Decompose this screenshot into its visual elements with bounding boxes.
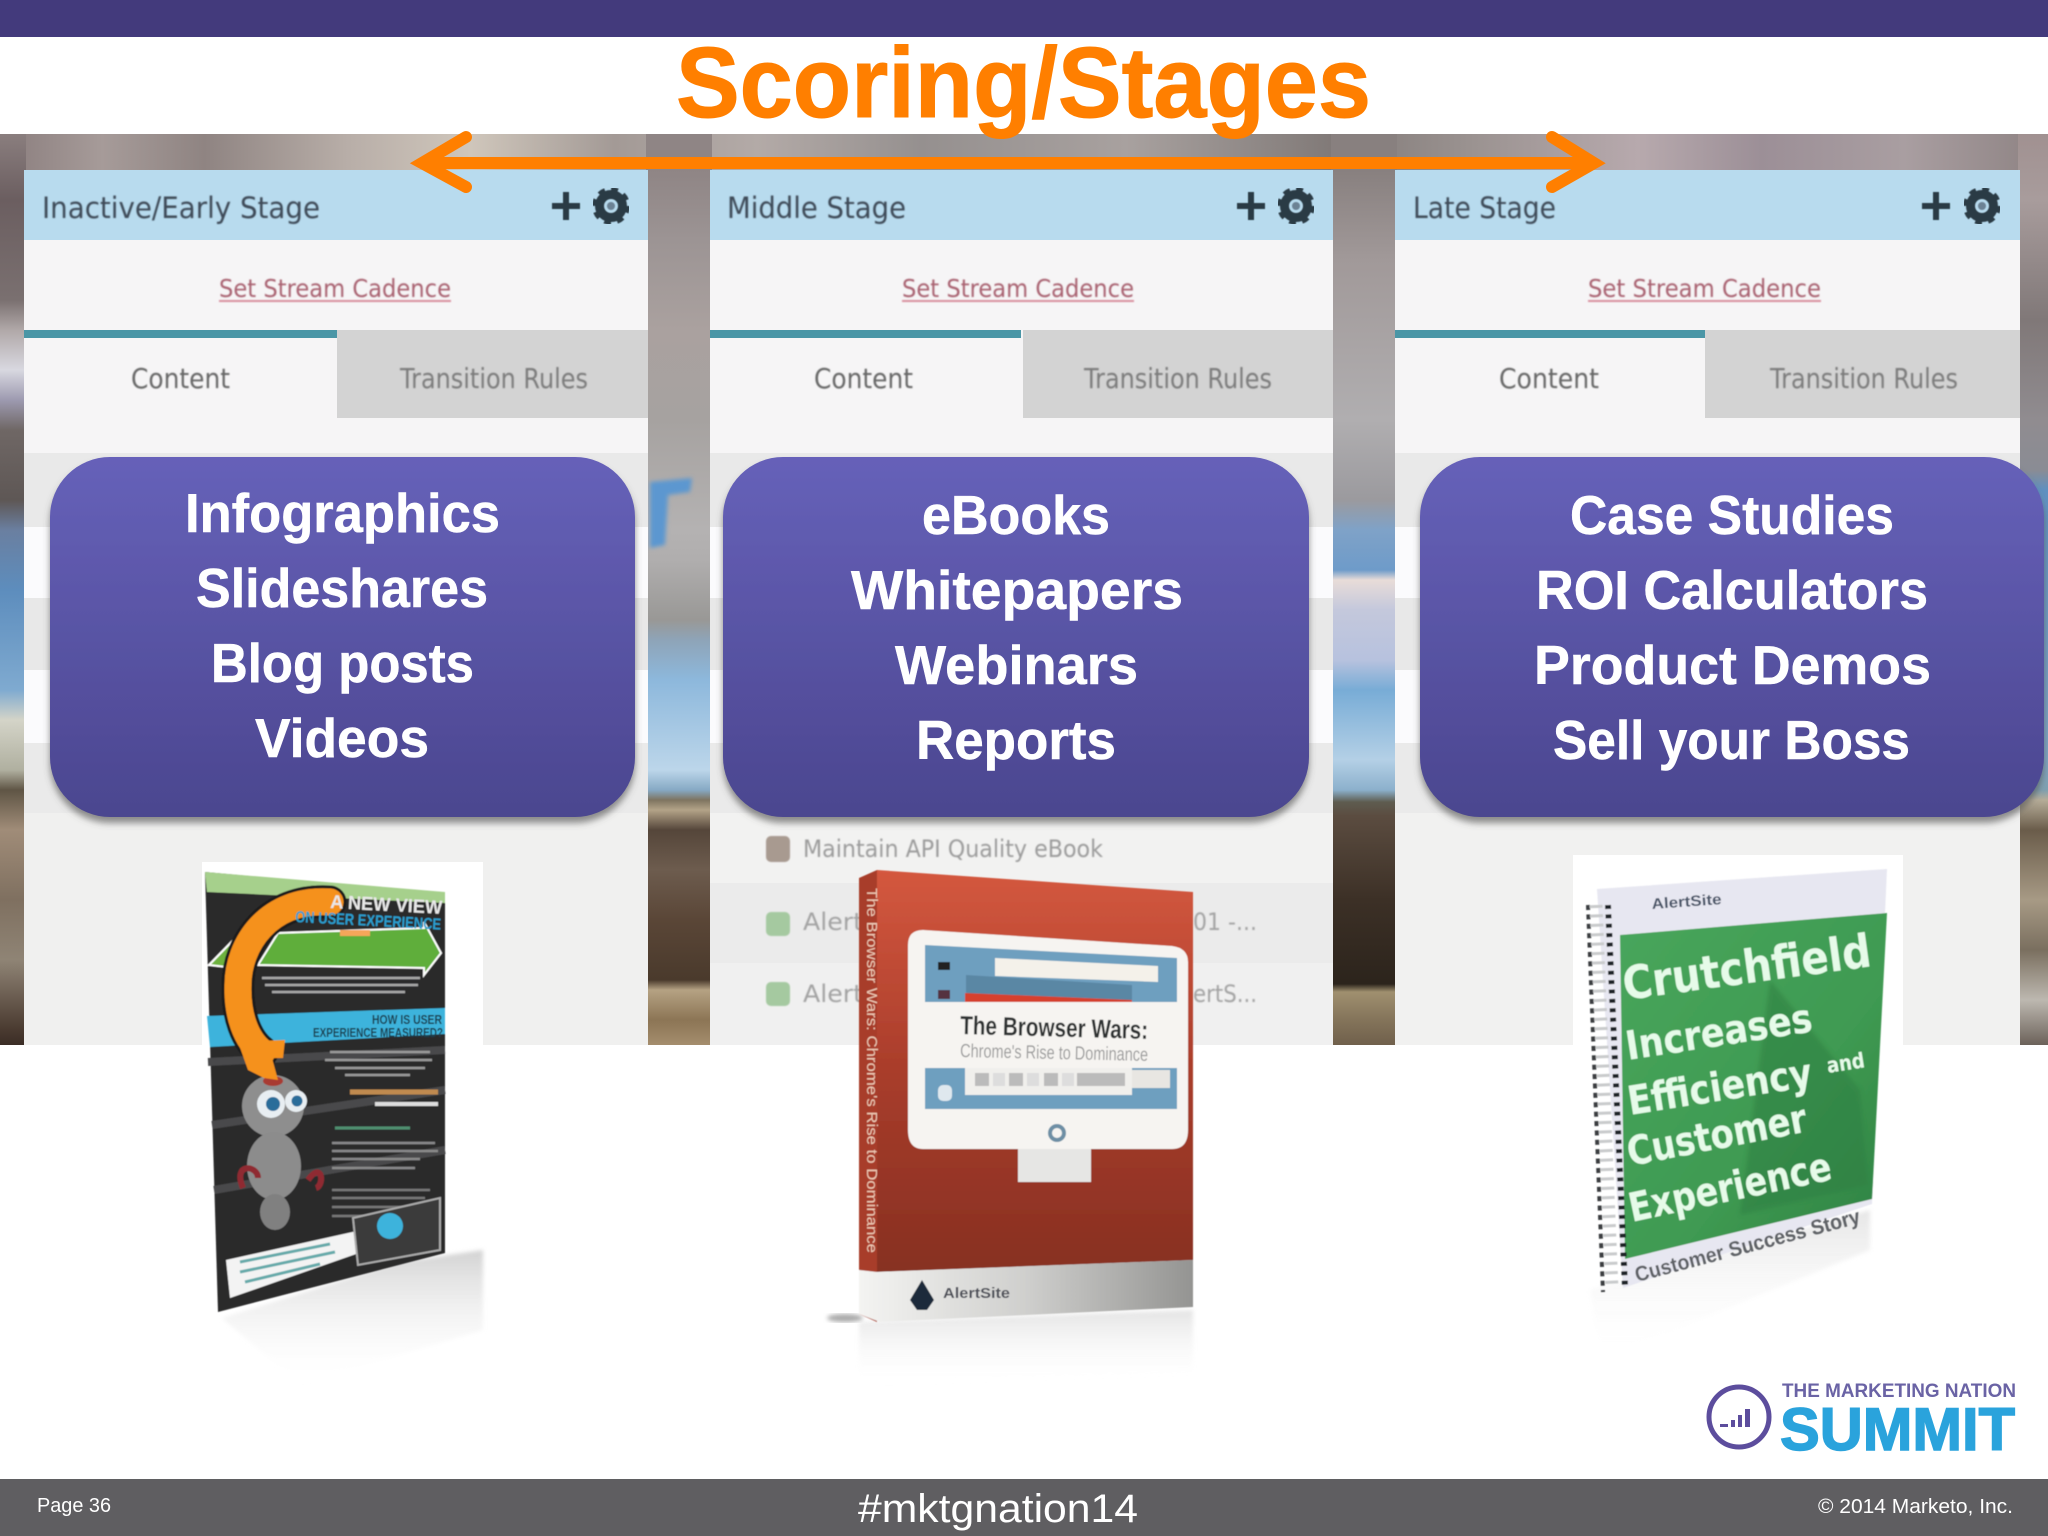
background photograph strips (0, 134, 2048, 1045)
header bar (1395, 170, 2020, 240)
callout: late stage content types: ROI Calculators (1536, 559, 1928, 621)
laptop reflection (222, 1250, 483, 1385)
icon: plus (1237, 192, 1265, 220)
content list rows: Alert (803, 980, 863, 1008)
callout: early stage content types (50, 457, 635, 817)
infographic thumbnail (202, 862, 483, 1385)
callout: late stage content types (1420, 457, 2044, 817)
copyright: © 2014 Marketo, Inc. (1818, 1496, 2013, 1518)
monitor (1018, 1140, 1091, 1182)
book shadow (827, 1314, 863, 1322)
tab: content (1395, 330, 1705, 395)
ebook thumbnail: The Browser Wars (827, 870, 1193, 1385)
callout: middle stage content types: Reports (916, 709, 1116, 771)
tab: transition rules (337, 330, 648, 418)
callout: middle stage content types: eBooks (922, 484, 1110, 546)
tab: content (24, 330, 337, 395)
callout: middle stage content types: Whitepapers (851, 559, 1183, 621)
callout: early stage content types: Infographics (185, 482, 500, 544)
book body: Chrome's Rise to Dominance (960, 1041, 1148, 1066)
AlertSite logo (910, 1280, 934, 1310)
book reflection (859, 1310, 1193, 1385)
callout: late stage content types: Case Studies (1570, 484, 1894, 546)
link: set stream cadence: Set Stream Cadence (902, 274, 1134, 303)
panel: Middle Stage (710, 170, 1333, 1045)
content list rows: ertS... (1193, 980, 1257, 1008)
notebook: and (1825, 1048, 1866, 1078)
poster sheet: EXPERIENCE MEASURED? (313, 1025, 443, 1040)
page number: Page 36 (37, 1495, 111, 1517)
content list rows: Maintain API Quality eBook (803, 835, 1103, 863)
tab: transition rules (1705, 330, 2020, 418)
notebook: Efficiency (1624, 1050, 1815, 1125)
header bar (710, 170, 1333, 240)
callout: early stage content types: Slideshares (196, 557, 488, 619)
poster headings: A NEW VIEW (330, 892, 443, 919)
tab: content: Content (814, 362, 913, 395)
icon: gear (1966, 190, 1998, 222)
book body: AlertSite (943, 1285, 1010, 1302)
notebook: AlertSite (1651, 891, 1722, 913)
spiral binding (1588, 905, 1625, 1292)
callout: middle stage content types (723, 457, 1309, 817)
content list rows: Alert (803, 908, 863, 936)
callout: middle stage content types: Webinars (895, 634, 1138, 696)
top purple bar (0, 0, 2048, 37)
logo: Marketing Nation Summit (1709, 1381, 2016, 1463)
header bar (24, 170, 648, 240)
callout: late stage content types: Sell your Boss (1553, 709, 1910, 771)
notebook: Customer (1623, 1096, 1811, 1176)
book body (859, 870, 1193, 1322)
hashtag: #mktgnation14 (858, 1487, 1138, 1531)
callout: late stage content types: Product Demos (1534, 634, 1931, 696)
notebook: Crutchfield (1619, 923, 1874, 1011)
tab: transition rules: Transition Rules (399, 362, 588, 395)
tab: content (710, 330, 1021, 395)
icon: plus (552, 192, 580, 220)
content list rows: 01 -... (1193, 908, 1257, 936)
footer bar (0, 1479, 2048, 1536)
tab: transition rules: Transition Rules (1769, 362, 1958, 395)
result box (226, 1221, 402, 1298)
logo tagline: THE MARKETING NATION (1782, 1381, 2016, 1402)
icon: gear (595, 190, 627, 222)
poster sheet: HOW IS USER (372, 1012, 442, 1027)
poster sheet (205, 872, 445, 1312)
tab: content: Content (131, 362, 230, 395)
notebook (1588, 869, 1887, 1292)
notebook reflection (1590, 1210, 1870, 1360)
notebook: Increases (1622, 996, 1815, 1070)
panel title: Inactive/Early Stage (42, 191, 320, 225)
orange arm (238, 902, 330, 1052)
link: set stream cadence: Set Stream Cadence (1588, 274, 1821, 303)
panel: Late Stage (1395, 170, 2020, 1045)
book body: The Browser Wars: (960, 1010, 1149, 1045)
arrow: scoring double-headed (422, 137, 1594, 187)
panel: Inactive/Early Stage (24, 170, 648, 1045)
icon: gear (1280, 190, 1312, 222)
callout: early stage content types: Videos (255, 707, 429, 769)
logo wordmark: SUMMIT (1780, 1396, 2015, 1463)
tab: content: Content (1499, 362, 1599, 395)
content list rows (766, 835, 1257, 1008)
notebook: Experience (1625, 1144, 1836, 1232)
callout: early stage content types: Blog posts (211, 632, 474, 694)
robot (242, 1075, 304, 1137)
poster sheet: ON USER EXPERIENCE (295, 909, 442, 934)
link: set stream cadence: Set Stream Cadence (219, 274, 451, 303)
panel title: Late Stage (1413, 191, 1556, 225)
tab: transition rules (1023, 330, 1333, 418)
icon: plus (1922, 192, 1950, 220)
case study thumbnail: Crutchfield (1573, 855, 1903, 1360)
notebook: Customer Success Story (1632, 1205, 1863, 1287)
tab: transition rules: Transition Rules (1083, 362, 1272, 395)
book body: The Browser Wars: Chrome's Rise to Dominance (863, 888, 880, 1253)
title: Scoring/Stages (676, 27, 1371, 139)
logo mark (1709, 1387, 1769, 1447)
panel title: Middle Stage (727, 191, 906, 225)
